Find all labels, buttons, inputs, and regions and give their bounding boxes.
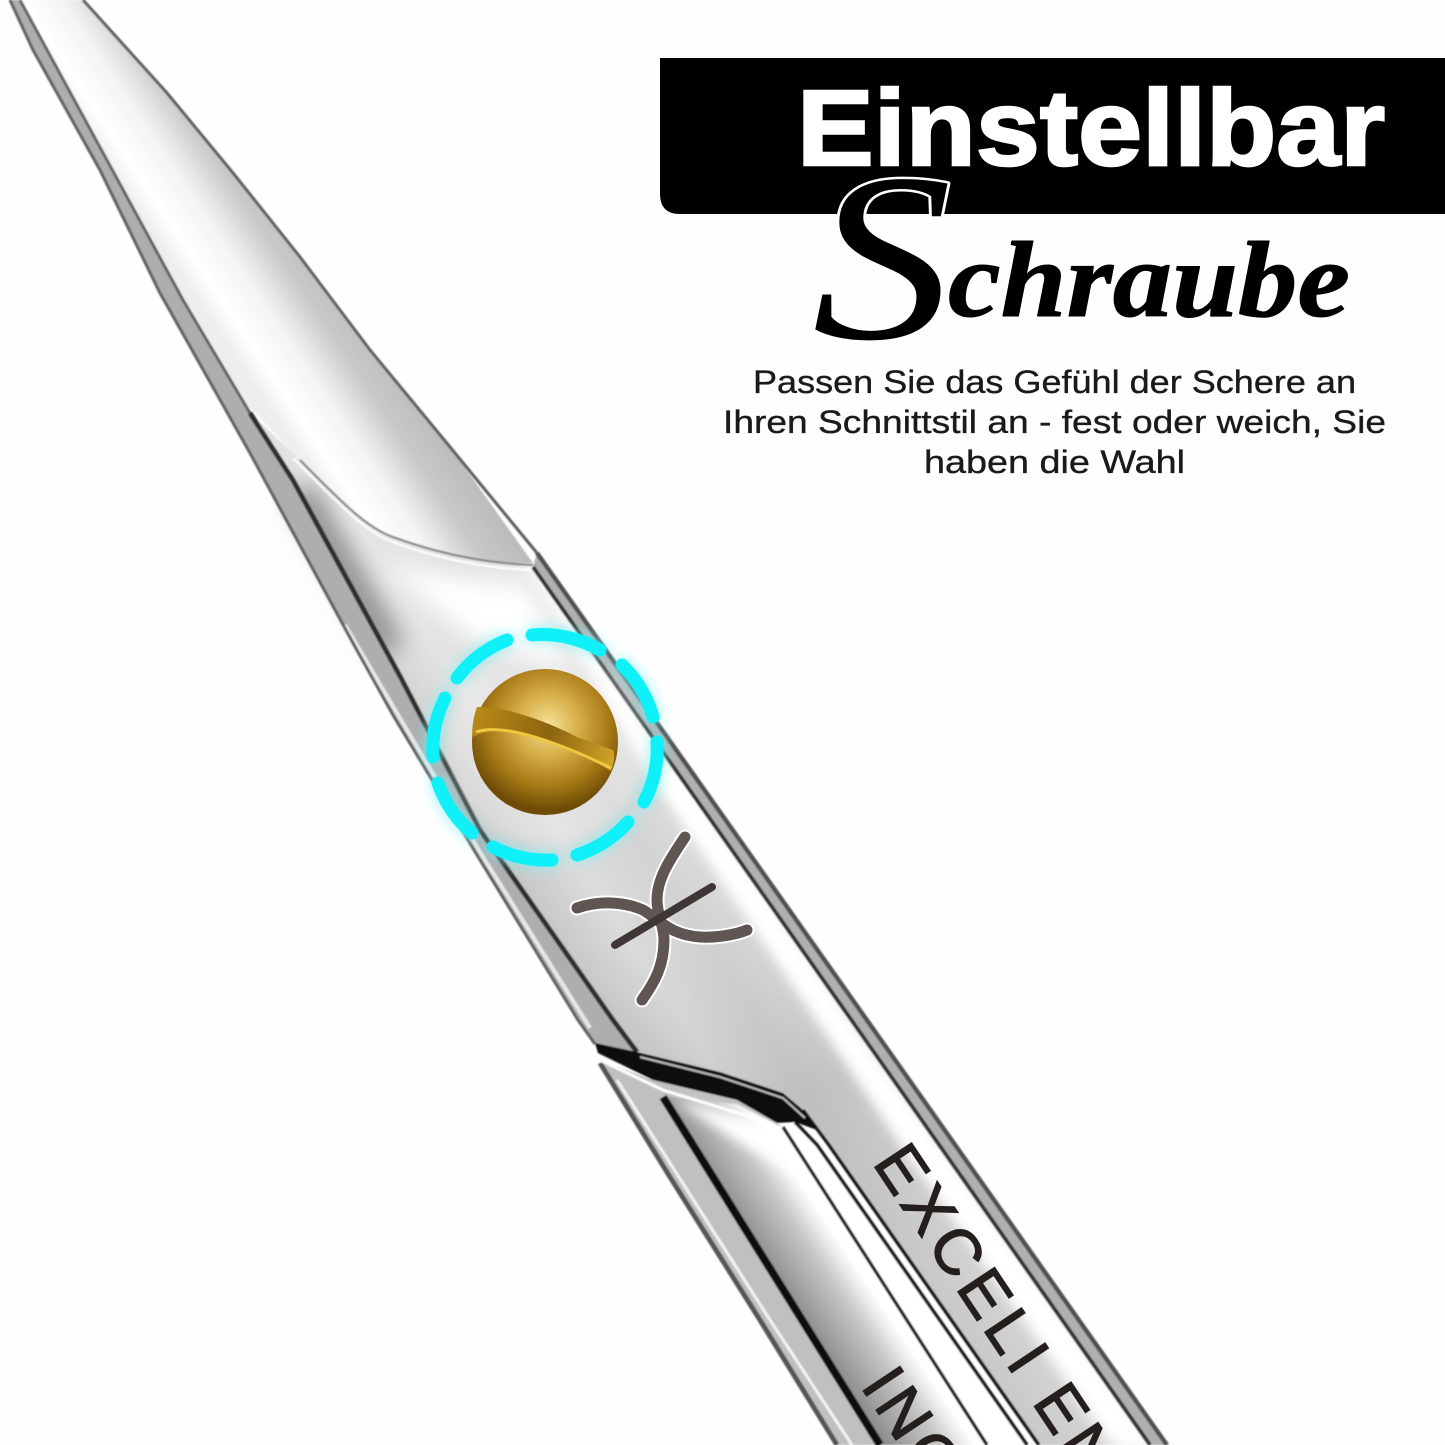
ring glow	[433, 635, 657, 860]
engraved text on blade	[848, 1131, 1136, 1445]
subtitle: script word: chraube	[948, 221, 1350, 340]
outer band highlight	[617, 1080, 852, 1445]
bevel curve highlight	[293, 458, 531, 570]
right metal band	[533, 553, 1167, 1445]
panel top highlight	[672, 1098, 805, 1180]
band inner dark line	[250, 413, 637, 1052]
ring dashes	[433, 635, 657, 860]
description line 3: haben die Wahl	[924, 444, 1185, 480]
left metal band	[10, 0, 637, 1052]
callout: dashed cyan ring around the screw	[433, 635, 657, 860]
title: Einstellbar	[797, 67, 1385, 188]
flat brushed face	[250, 413, 1150, 1445]
upper right edge line	[83, 0, 537, 553]
lower blade panel	[668, 1097, 987, 1445]
right band outer line	[537, 553, 1167, 1445]
right white strip	[533, 567, 1150, 1445]
right band inner line	[533, 567, 1150, 1445]
band outer line	[10, 0, 595, 1044]
subtitle: script word: S	[812, 124, 952, 390]
screw slot	[472, 707, 614, 771]
slot highlight	[476, 730, 611, 768]
bevel of the cutting blade	[20, 0, 533, 563]
screw head	[472, 669, 618, 815]
heading panel: black bar	[660, 58, 1445, 214]
description line 1: Passen Sie das Gefühl der Schere an	[753, 364, 1356, 400]
shadow along inner line	[300, 490, 392, 650]
icon: engraved logo	[577, 837, 747, 1000]
face shading	[250, 413, 1150, 1445]
lower blade outer band	[600, 1060, 987, 1445]
white strip beside grooves	[785, 1122, 1027, 1445]
highlight under bevel	[385, 565, 570, 670]
band inner thin line	[20, 0, 250, 413]
text block: description	[723, 364, 1386, 480]
notch inner highlight	[640, 1057, 805, 1118]
notch black band	[595, 1043, 817, 1130]
white halo	[445, 645, 645, 845]
icon: gold slotted screw	[472, 669, 618, 815]
groove lines	[783, 1110, 1039, 1445]
band highlight	[345, 625, 590, 1028]
lower blade outer line	[600, 1063, 837, 1445]
bevel curve line	[300, 460, 533, 565]
lower blade dark edge	[663, 1097, 880, 1445]
notch white line	[600, 1060, 770, 1123]
description line 2: Ihren Schnittstil an - fest oder weich, Sie	[723, 404, 1386, 440]
